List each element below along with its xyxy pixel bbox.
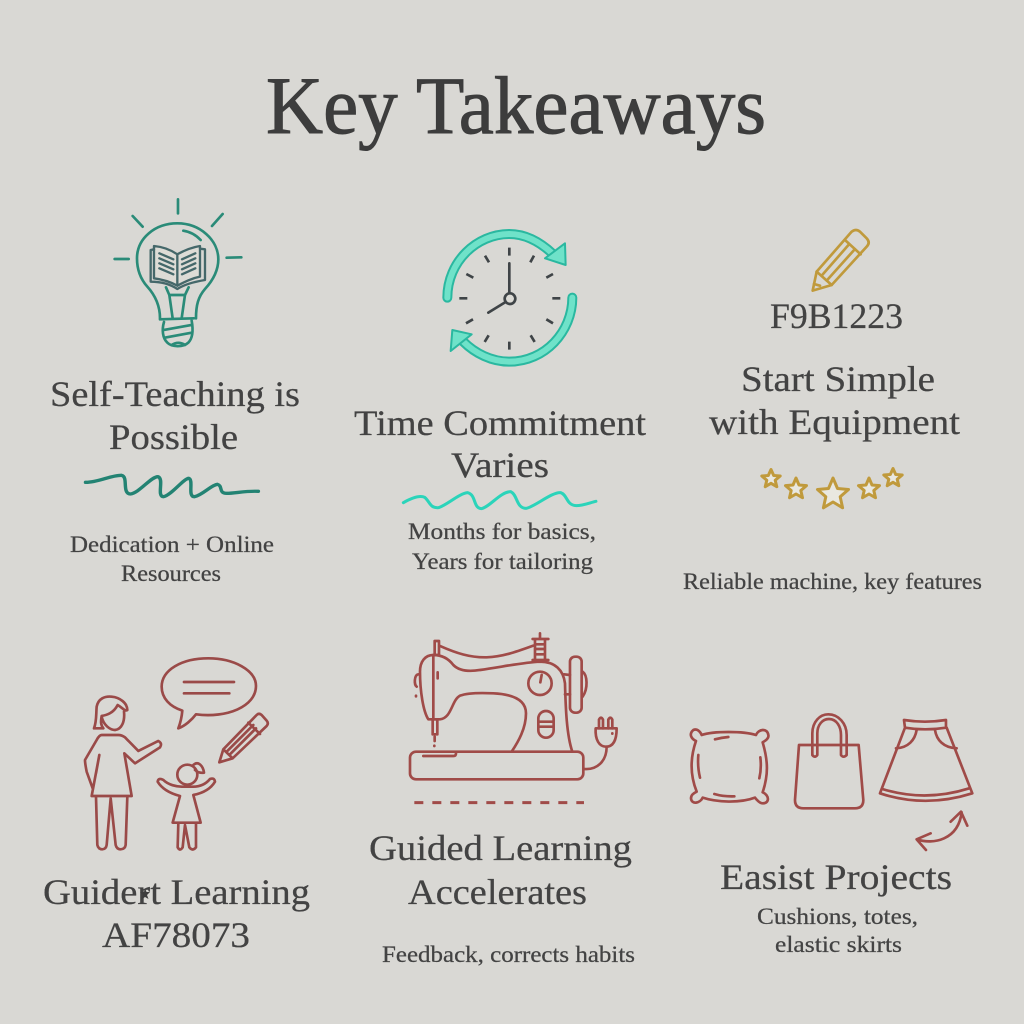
panel: easiest projects	[691, 714, 972, 957]
description: Resources	[121, 561, 221, 586]
icon: sewing machine	[410, 633, 617, 803]
heading: Time Commitment	[354, 403, 646, 443]
heading: Accelerates	[408, 872, 587, 912]
heading	[43, 872, 310, 955]
panel: self-teaching	[50, 199, 300, 586]
icon: teacher and child	[85, 658, 268, 849]
description: Months for basics,	[408, 519, 596, 544]
description	[408, 519, 596, 574]
icon: five stars	[762, 468, 902, 508]
icon: clock with arrows	[447, 234, 572, 362]
description: elastic skirts	[775, 932, 902, 957]
heading	[354, 403, 646, 485]
icon: cushion, tote and skirt	[691, 714, 972, 850]
icon: light bulb with book	[115, 199, 241, 346]
icon: gold pencil	[813, 230, 869, 291]
description: Years for tailoring	[412, 549, 594, 574]
heading: with Equipment	[709, 402, 960, 442]
heading: Varies	[451, 445, 549, 485]
heading	[369, 828, 632, 912]
panel: start simple	[683, 230, 982, 594]
description: Dedication + Online	[70, 532, 274, 557]
heading: AF78073	[102, 915, 250, 955]
heading: Possible	[109, 417, 238, 457]
squiggle	[85, 475, 258, 497]
heading: Guided Learning	[369, 828, 632, 868]
description	[757, 904, 918, 957]
heading: Guidert Learning	[43, 872, 310, 912]
description	[70, 532, 274, 586]
code label: F9B1223	[770, 296, 903, 336]
heading	[709, 359, 960, 442]
panel: time commitment	[354, 234, 646, 574]
squiggle	[403, 492, 596, 509]
panel: guided learning left	[43, 658, 310, 955]
heading: Easist Projects	[720, 857, 952, 897]
description: Cushions, totes,	[757, 904, 918, 929]
heading	[50, 374, 300, 457]
heading: Self-Teaching is	[50, 374, 300, 414]
description: Feedback, corrects habits	[382, 942, 635, 967]
description: Reliable machine, key features	[683, 569, 982, 594]
heading: Start Simple	[741, 359, 935, 399]
title: Key Takeaways	[266, 60, 766, 151]
panel: guided learning accelerates	[369, 633, 635, 967]
